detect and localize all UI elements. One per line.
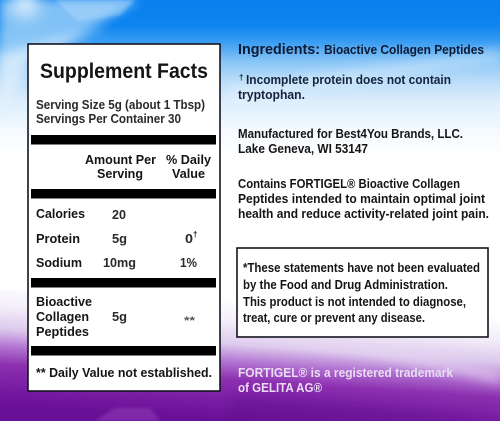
trademark note	[238, 366, 453, 395]
fortigel description: health and reduce activity-related joint pain.	[238, 207, 489, 221]
row: calories: Calories	[36, 207, 85, 221]
callout: fda disclaimer: treat, cure or prevent any disease.	[243, 311, 425, 325]
callout: fda disclaimer: by the Food and Drug Administration.	[243, 278, 448, 292]
row: sodium: Sodium	[36, 256, 82, 270]
tryptophan note	[238, 73, 451, 102]
manufacturer: Lake Geneva, WI 53147	[238, 142, 368, 156]
tryptophan note: tryptophan.	[238, 88, 305, 102]
divider bar 4	[31, 346, 216, 356]
tryptophan note: †	[239, 73, 243, 82]
callout: fda disclaimer: This product is not intended to diagnose,	[243, 295, 466, 309]
row: protein: 0	[185, 232, 193, 246]
column headers: Serving	[97, 167, 143, 181]
column headers: % Daily	[166, 153, 211, 167]
callout: fda disclaimer	[237, 248, 488, 337]
trademark note: of GELITA AG®	[238, 381, 323, 395]
row: sodium: 10mg	[103, 256, 136, 270]
row: bioactive collagen peptides: **	[184, 315, 196, 327]
tryptophan note: Incomplete protein does not contain	[246, 73, 451, 87]
column headers	[85, 153, 211, 181]
fortigel description	[238, 177, 489, 221]
panel: supplement facts	[28, 44, 220, 391]
row: protein: †	[193, 230, 197, 239]
row: protein	[36, 230, 197, 246]
footnote: daily value: ** Daily Value not established.	[36, 365, 212, 380]
trademark note: FORTIGEL® is a registered trademark	[238, 366, 453, 380]
manufacturer: Manufactured for Best4You Brands, LLC.	[238, 127, 463, 141]
ingredients: Ingredients:	[238, 42, 320, 58]
ingredients	[238, 42, 484, 58]
row: calories: 20	[112, 208, 126, 222]
column headers: Value	[172, 167, 205, 181]
manufacturer	[238, 127, 463, 156]
serving information: Servings Per Container 30	[36, 112, 181, 126]
row: sodium: 1%	[180, 256, 197, 270]
row: bioactive collagen peptides: 5g	[112, 310, 127, 324]
serving information	[36, 98, 205, 126]
serving information: Serving Size 5g (about 1 Tbsp)	[36, 98, 205, 112]
row: bioactive collagen peptides: Collagen	[36, 310, 89, 324]
divider bar 3	[31, 278, 216, 288]
divider bar 1	[31, 135, 216, 144]
divider bar 2	[31, 189, 216, 198]
row: calories	[36, 207, 126, 222]
callout: fda disclaimer: *These statements have not been evaluated	[243, 261, 480, 275]
row: bioactive collagen peptides	[36, 295, 196, 339]
column headers: Amount Per	[85, 153, 156, 167]
row: sodium	[36, 256, 197, 270]
fortigel description: Contains FORTIGEL® Bioactive Collagen	[238, 177, 460, 191]
row: bioactive collagen peptides: Peptides	[36, 325, 89, 339]
row: bioactive collagen peptides: Bioactive	[36, 295, 92, 309]
fortigel description: Peptides intended to maintain optimal joint	[238, 192, 486, 206]
title: supplement facts: Supplement Facts	[40, 60, 208, 83]
ingredients: Bioactive Collagen Peptides	[324, 43, 484, 57]
row: protein: Protein	[36, 232, 80, 246]
row: protein: 5g	[112, 232, 127, 246]
